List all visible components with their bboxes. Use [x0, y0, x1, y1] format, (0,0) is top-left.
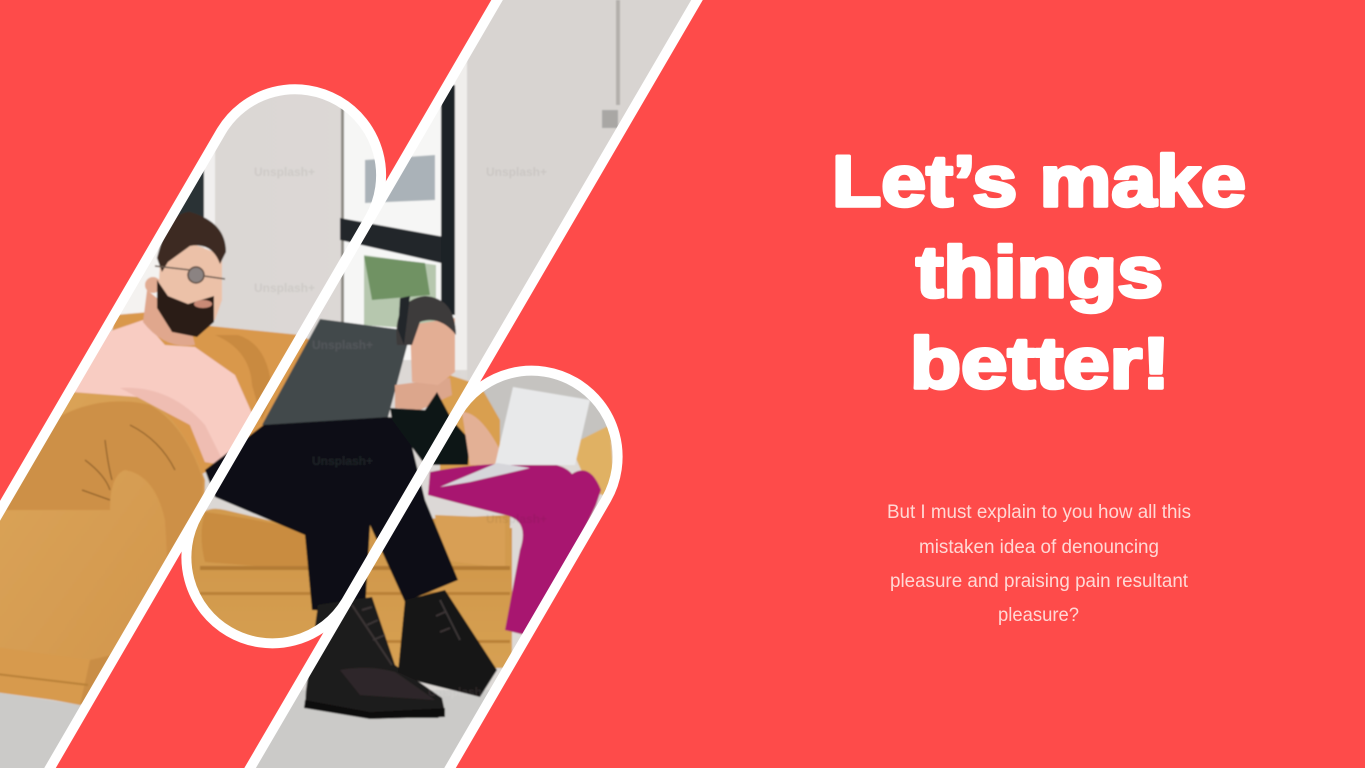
light photo watermarks over dark areas — [312, 338, 489, 699]
body text: pleasure? — [998, 605, 1079, 626]
body text — [887, 502, 1191, 626]
white capsule outlines — [0, 0, 725, 768]
body text: But I must explain to you how all this — [887, 502, 1191, 523]
man trousers — [205, 415, 458, 612]
dark laptop — [262, 319, 411, 425]
sofa seat — [186, 509, 512, 668]
light photo watermarks over dark areas: Unsplash+ — [312, 338, 373, 352]
title: Let’s make — [832, 142, 1246, 222]
sofa back — [100, 312, 615, 500]
faint photo watermarks: Unsplash+ — [254, 281, 315, 295]
faint photo watermarks: Unsplash+ — [486, 512, 547, 526]
light photo watermarks over dark areas: Unsplash+ — [312, 454, 373, 468]
title: things — [916, 233, 1163, 313]
light photo watermarks over dark areas: Unsplash+ — [428, 685, 489, 699]
man head — [143, 212, 226, 346]
man boots — [304, 590, 497, 719]
sofa armrest — [0, 388, 205, 705]
man shirt — [72, 320, 255, 465]
title — [832, 142, 1246, 404]
faint photo watermarks: Unsplash+ — [486, 165, 547, 179]
body text: pleasure and praising pain resultant — [890, 571, 1189, 592]
photo: two people working on laptops on a mustard sofa — [0, 0, 692, 768]
body text: mistaken idea of denouncing — [919, 537, 1159, 558]
title: better! — [910, 324, 1170, 404]
white laptop — [440, 387, 590, 487]
floor — [0, 690, 520, 768]
room wall and window — [0, 0, 692, 705]
woman — [390, 296, 601, 640]
faint photo watermarks: Unsplash+ — [254, 165, 315, 179]
faint photo watermarks — [254, 165, 547, 526]
